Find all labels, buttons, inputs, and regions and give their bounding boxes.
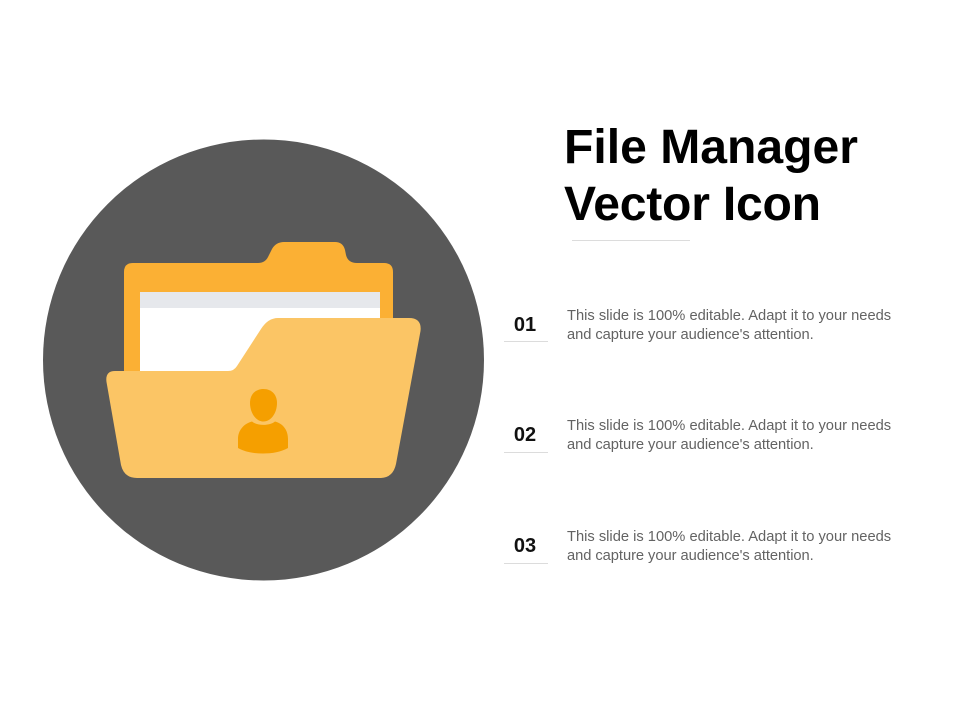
item 03 (504, 529, 891, 564)
folder front (106, 318, 421, 478)
person body (238, 422, 288, 454)
description 02 (567, 418, 891, 453)
icon: person (238, 389, 288, 454)
description 03: and capture your audience's attention. (567, 548, 814, 564)
illustration: folder in circle (43, 140, 484, 580)
description 02: and capture your audience's attention. (567, 437, 814, 453)
item 02 (504, 418, 891, 453)
paper header strip (140, 292, 380, 308)
title (564, 120, 858, 231)
description 01: This slide is 100% editable. Adapt it to your needs (567, 308, 891, 324)
folder back with tab (124, 242, 393, 380)
number rule 03 (504, 563, 548, 564)
number rule 02 (504, 452, 548, 453)
paper sheet (140, 292, 380, 377)
number 01: 01 (514, 314, 536, 336)
description 01: and capture your audience's attention. (567, 327, 814, 343)
title: File Manager (564, 120, 858, 174)
description 03: This slide is 100% editable. Adapt it to your needs (567, 529, 891, 545)
description 03 (567, 529, 891, 564)
person head (250, 389, 277, 422)
item 01 (504, 308, 891, 343)
description 02: This slide is 100% editable. Adapt it to your needs (567, 418, 891, 434)
title: Vector Icon (564, 177, 821, 231)
title underline (572, 240, 690, 241)
number rule 01 (504, 341, 548, 342)
number 03: 03 (514, 535, 536, 557)
icon: open folder (106, 242, 421, 478)
description 01 (567, 308, 891, 343)
dark circle background (43, 140, 484, 580)
number 02: 02 (514, 424, 536, 446)
